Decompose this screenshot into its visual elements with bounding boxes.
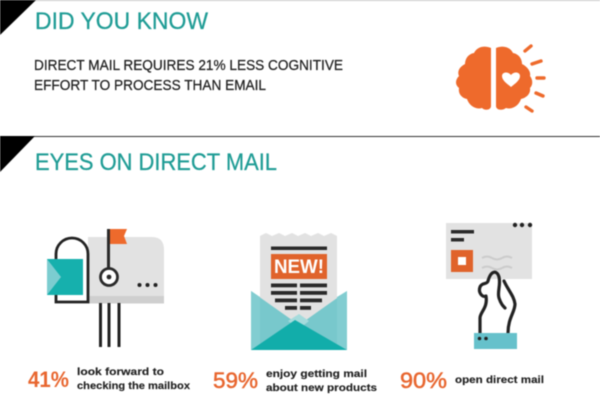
stat: 59 percent: 59% bbox=[213, 368, 258, 393]
stat: 59 percent: enjoy getting mail bbox=[266, 368, 367, 380]
icon: brain with heart bbox=[456, 46, 544, 111]
heading: eyes on direct mail: EYES ON DIRECT MAIL bbox=[35, 149, 277, 176]
stat: 90 percent: 90% bbox=[400, 368, 447, 393]
icon: hand holding letter bbox=[446, 223, 532, 349]
stat: 59 percent: about new products bbox=[266, 382, 377, 394]
stat: 41 percent: 41% bbox=[28, 367, 69, 392]
stat: 41 percent: look forward to bbox=[77, 366, 164, 378]
stat: 59 percent bbox=[213, 368, 377, 394]
stat: 41 percent: checking the mailbox bbox=[77, 380, 190, 392]
stat: 41 percent bbox=[28, 366, 190, 392]
panel: did you know bbox=[0, 0, 544, 111]
text block: cognitive effort bbox=[34, 58, 343, 94]
corner triangle: did you know bbox=[0, 0, 36, 35]
icon: envelope with newsletter: NEW! bbox=[274, 257, 324, 278]
text block: cognitive effort: DIRECT MAIL REQUIRES 21% LESS COGNITIVE bbox=[34, 58, 343, 74]
stat: 90 percent bbox=[400, 368, 544, 393]
heading: did you know: DID YOU KNOW bbox=[35, 8, 208, 35]
corner triangle: eyes on direct mail bbox=[0, 136, 35, 172]
icon: envelope with newsletter bbox=[251, 233, 347, 350]
panel: eyes on direct mail bbox=[0, 136, 544, 394]
text block: cognitive effort: EFFORT TO PROCESS THAN EMAIL bbox=[34, 78, 266, 94]
icon: mailbox bbox=[47, 229, 164, 347]
stat: 90 percent: open direct mail bbox=[455, 374, 544, 386]
